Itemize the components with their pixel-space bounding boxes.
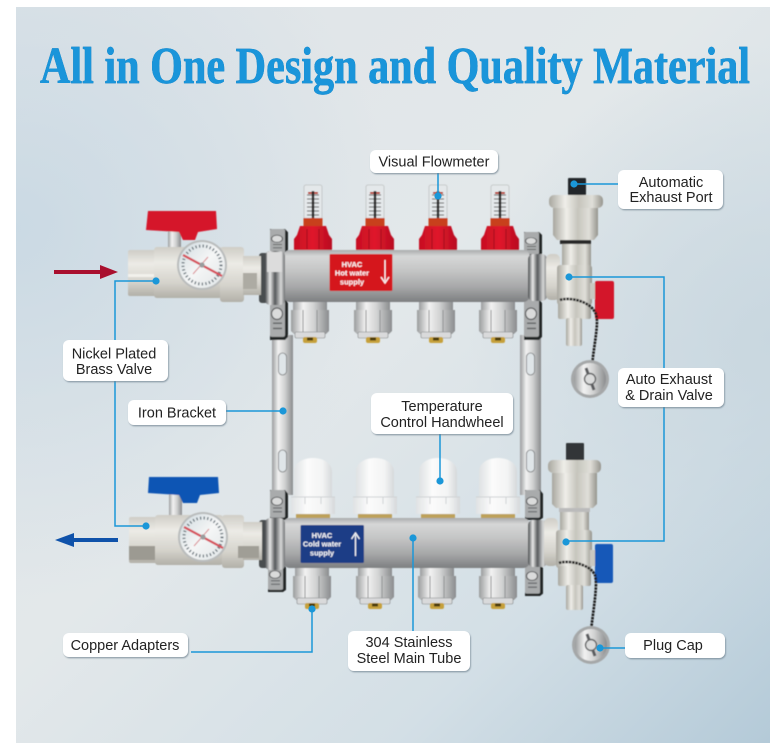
callout: 304 Stainless Steel Main Tube: Steel Main Tube xyxy=(357,651,461,667)
callout: Automatic Exhaust Port: Exhaust Port xyxy=(629,190,713,206)
callout: Nickel Plated Brass Valve: Nickel Plated xyxy=(72,346,156,362)
blue cold water sticker xyxy=(300,525,364,563)
top red ball valve xyxy=(128,211,261,302)
callout: Copper Adapters: Copper Adapters xyxy=(71,638,179,654)
exhaust port cap xyxy=(568,178,586,196)
bottom stainless steel tube xyxy=(283,518,530,568)
top manifold xyxy=(259,185,547,343)
top plug cap xyxy=(571,360,609,398)
manifold product illustration xyxy=(128,178,614,664)
top bracket clamps xyxy=(270,229,542,340)
callout: Temperature Control Handwheel: Temperature xyxy=(401,399,483,415)
top stainless steel tube xyxy=(283,250,530,302)
top left chrome union xyxy=(259,251,285,305)
bottom plug cap xyxy=(572,626,610,664)
blue handle xyxy=(148,477,219,503)
callout: Automatic Exhaust Port: Automatic xyxy=(639,175,703,191)
callout: Visual Flowmeter: Visual Flowmeter xyxy=(379,154,490,170)
blue drain handle xyxy=(595,544,613,583)
blue cold water sticker: HVAC xyxy=(312,531,333,540)
bottom blue ball valve xyxy=(129,477,262,568)
blue cold water sticker: Cold water xyxy=(303,540,341,548)
red hot water sticker: supply xyxy=(340,278,365,286)
callout: Iron Bracket: Iron Bracket xyxy=(138,406,216,422)
flow arrow: outlet blue xyxy=(55,533,118,547)
callout: Iron Bracket xyxy=(128,400,226,425)
top automatic exhaust and drain valve xyxy=(546,178,614,398)
callout: Temperature Control Handwheel: Control Handwheel xyxy=(380,415,504,431)
flow arrow: inlet red xyxy=(54,265,118,279)
callout: Plug Cap: Plug Cap xyxy=(643,638,703,654)
bottom chain xyxy=(559,562,596,631)
blue cold water sticker: supply xyxy=(310,548,335,558)
top valve gauge xyxy=(177,240,227,290)
callout: Auto Exhaust & Drain Valve xyxy=(618,368,724,407)
top compression fittings xyxy=(291,302,517,343)
bottom exhaust cap xyxy=(566,443,584,461)
red handle xyxy=(146,211,217,240)
bottom bracket clamps xyxy=(268,490,543,596)
bottom manifold xyxy=(259,458,547,609)
bottom left chrome union xyxy=(259,518,285,570)
callout: Copper Adapters xyxy=(63,633,188,657)
red drain handle xyxy=(595,281,614,319)
red hot water sticker: HVAC xyxy=(342,260,363,269)
leader lines and dots xyxy=(115,173,664,652)
callout: 304 Stainless Steel Main Tube: 304 Stainless xyxy=(365,635,453,651)
callout: Auto Exhaust & Drain Valve: & Drain Valve xyxy=(625,388,713,404)
callout: Nickel Plated Brass Valve xyxy=(63,340,168,381)
bottom right chrome union xyxy=(528,520,547,567)
temperature control handwheels xyxy=(291,458,520,518)
callout: 304 Stainless Steel Main Tube xyxy=(348,631,470,671)
red hot water sticker: Hot water xyxy=(335,268,369,278)
bottom automatic exhaust and drain valve xyxy=(544,443,613,664)
callout: Visual Flowmeter xyxy=(370,150,498,173)
chain xyxy=(560,299,597,366)
red hot water sticker xyxy=(330,254,392,291)
flowmeters xyxy=(294,185,519,250)
iron bracket straps xyxy=(272,335,541,495)
callout: Auto Exhaust & Drain Valve: Auto Exhaust xyxy=(626,372,712,388)
callout: Nickel Plated Brass Valve: Brass Valve xyxy=(76,362,152,378)
callout: Temperature Control Handwheel xyxy=(371,393,513,434)
callout: Plug Cap xyxy=(625,633,725,658)
top right chrome union xyxy=(528,254,547,301)
callout: Automatic Exhaust Port xyxy=(618,170,723,209)
bottom valve gauge xyxy=(178,512,228,562)
bottom compression fittings xyxy=(293,568,517,609)
